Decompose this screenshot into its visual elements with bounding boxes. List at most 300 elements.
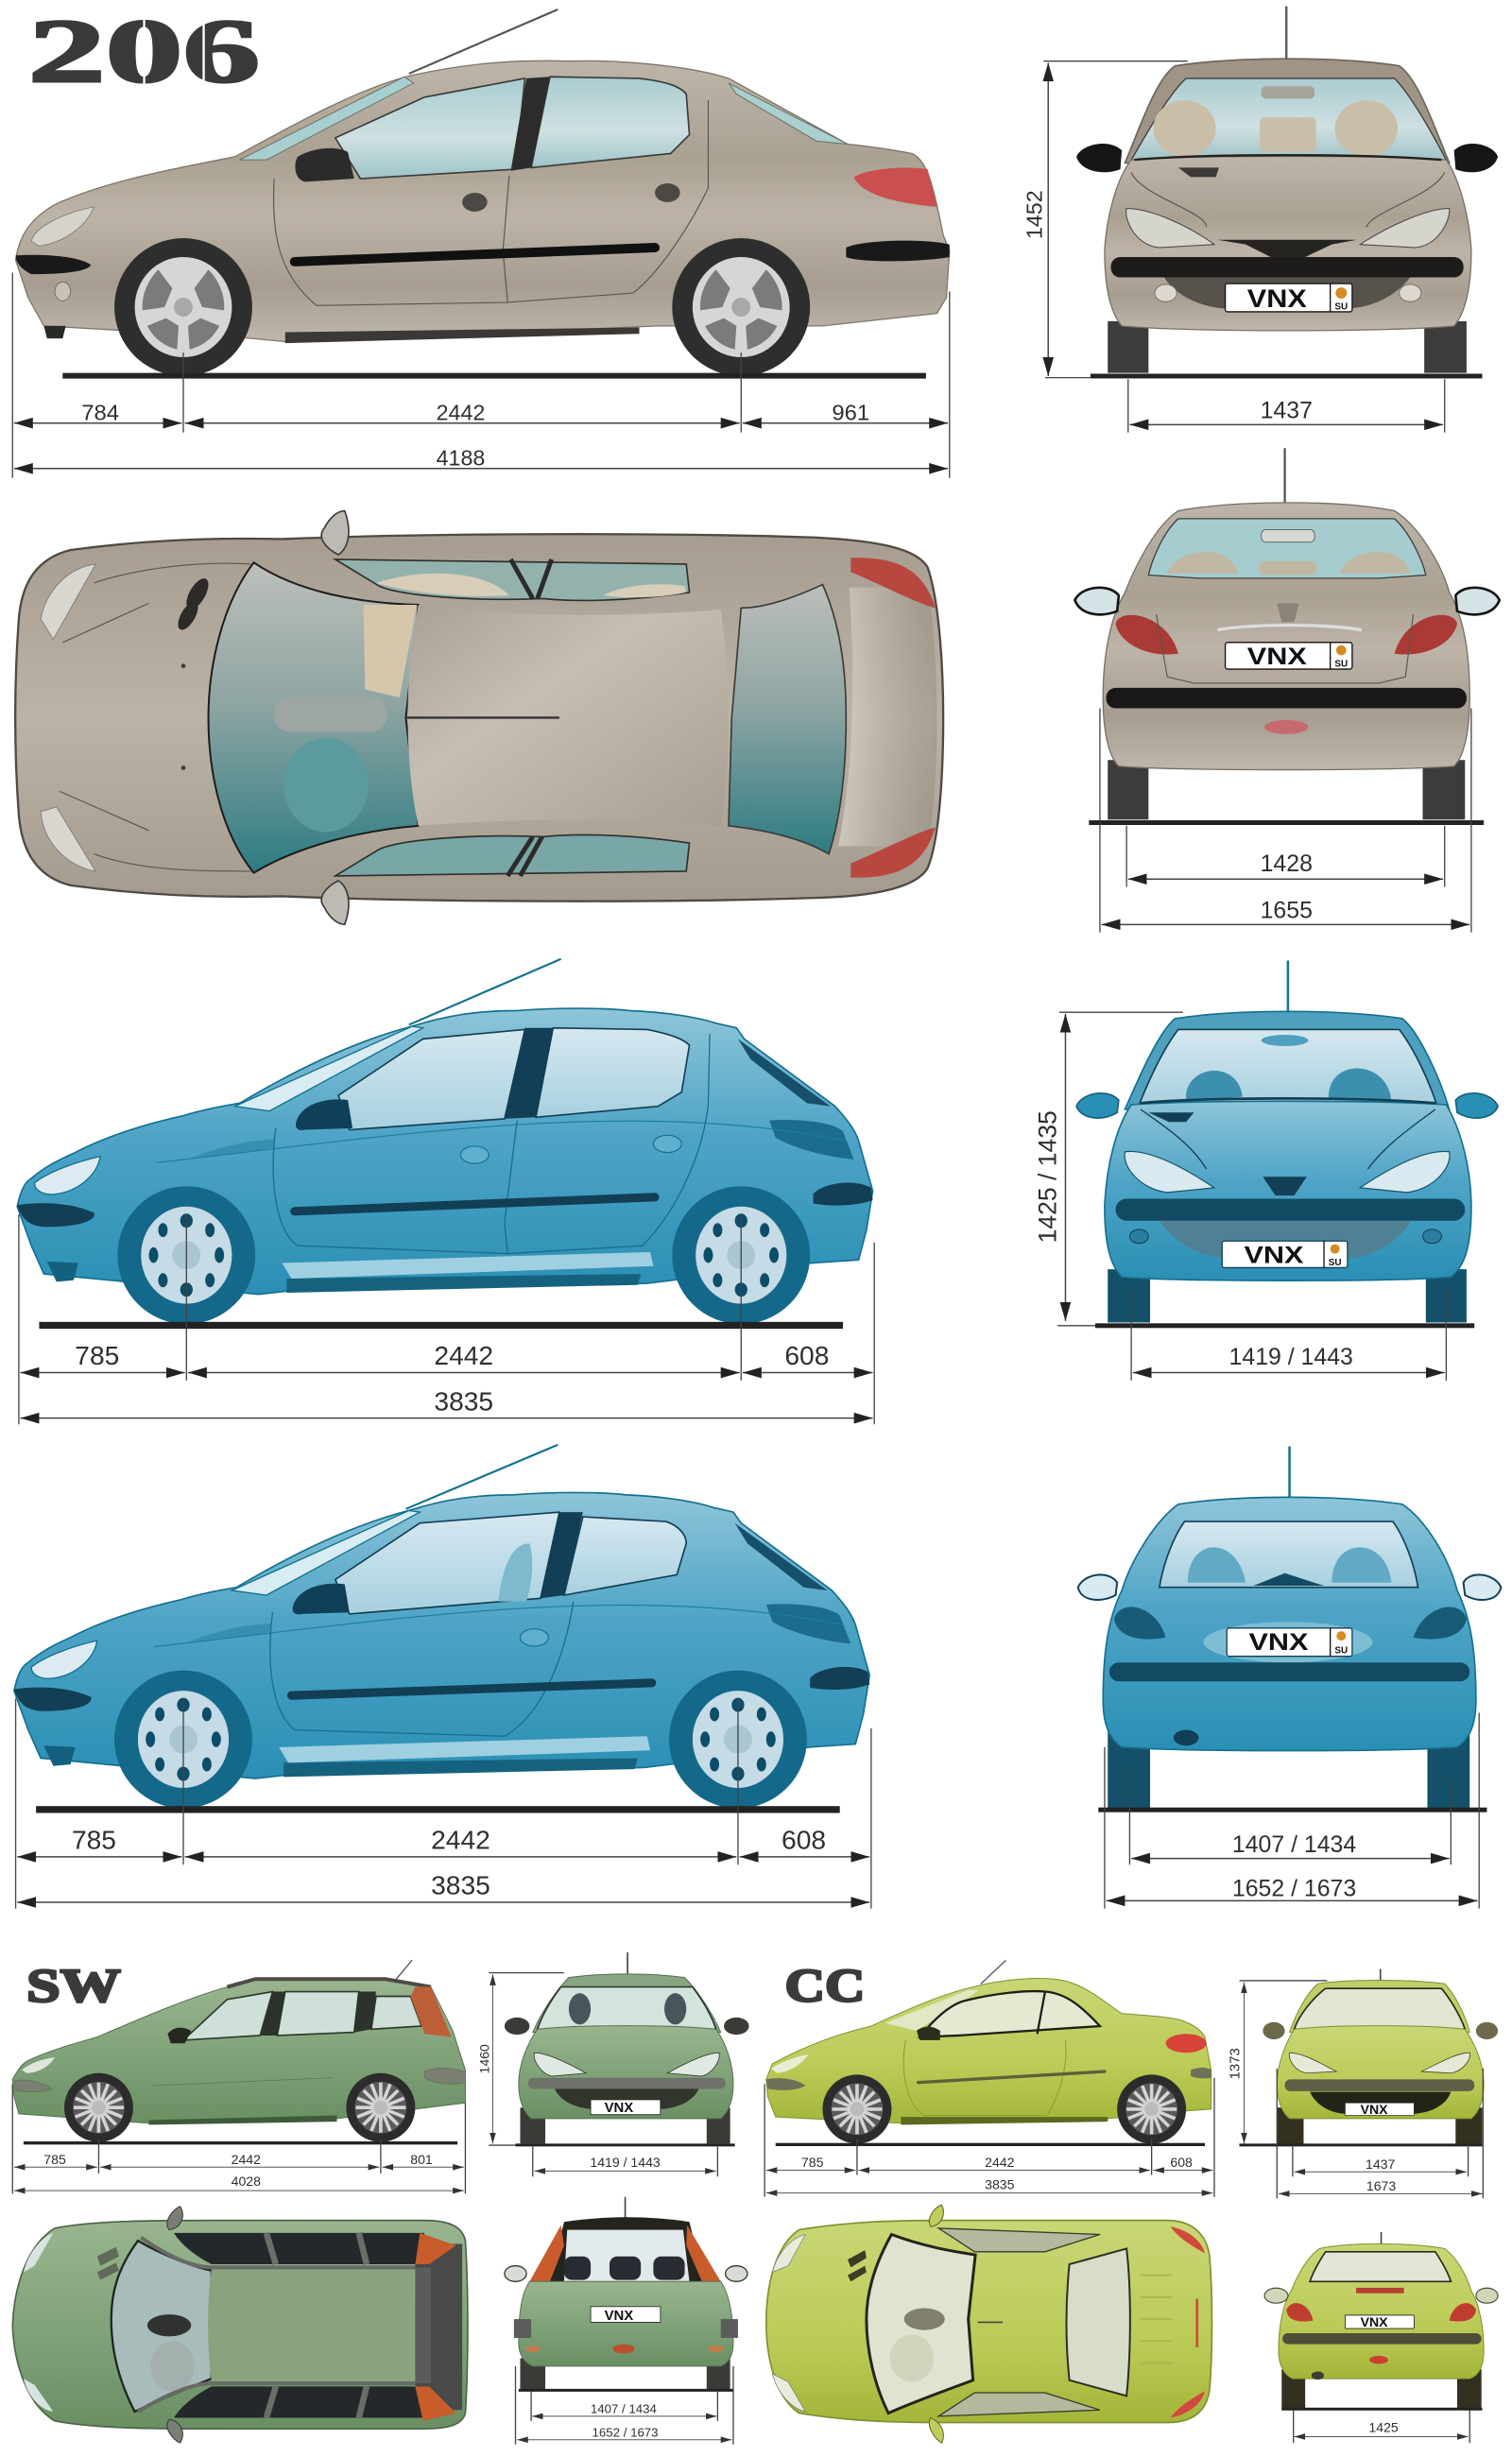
tail light bbox=[854, 168, 937, 207]
dimensions: CC side: 608 bbox=[1170, 2155, 1193, 2170]
roof rail bbox=[227, 1979, 431, 1987]
panel: SW front view bbox=[505, 1952, 749, 2146]
front window bbox=[183, 1992, 272, 2040]
panel: 3-door side view bbox=[14, 1445, 869, 1813]
body bbox=[519, 2281, 733, 2366]
antenna bbox=[1380, 1968, 1382, 1987]
orange pillars bbox=[415, 2233, 455, 2421]
rear window bbox=[564, 1517, 686, 1595]
dimensions: CC side: 3835 bbox=[985, 2176, 1015, 2191]
windscreen bbox=[112, 2241, 212, 2412]
panel: SW side view bbox=[12, 1960, 465, 2144]
antenna bbox=[625, 2197, 627, 2221]
dimensions: sedan rear bbox=[1100, 708, 1471, 933]
hood lines bbox=[1131, 172, 1445, 227]
body bbox=[1105, 156, 1471, 331]
bumper strip bbox=[1116, 1198, 1465, 1221]
antenna bbox=[409, 959, 561, 1024]
mirrors bbox=[1076, 144, 1498, 172]
side lamps bbox=[514, 2319, 738, 2338]
dimensions: hatch rear: 1407 / 1434 bbox=[1232, 1831, 1356, 1858]
hood dots bbox=[181, 663, 185, 770]
vents bbox=[1178, 167, 1219, 177]
roof rails bbox=[138, 2238, 415, 2412]
panel: CC top view bbox=[766, 2205, 1211, 2443]
bumper strip bbox=[1109, 1662, 1469, 1681]
panel: hatch rear view bbox=[1078, 1446, 1501, 1813]
side window top bbox=[335, 559, 690, 600]
strips bbox=[766, 2068, 1211, 2090]
door lines bbox=[273, 100, 708, 305]
rear deck stripes bbox=[1141, 2276, 1172, 2363]
boot panel bbox=[1157, 614, 1414, 683]
side moulding bbox=[291, 1683, 652, 1695]
cabin bbox=[1125, 1011, 1450, 1109]
ground line bbox=[36, 1806, 840, 1813]
high brake light bbox=[1196, 2299, 1198, 2347]
body bbox=[15, 534, 943, 902]
rear window bbox=[1160, 1521, 1418, 1588]
interior top bbox=[376, 574, 686, 597]
dimensions: 5-door side: 785 bbox=[75, 1340, 119, 1370]
B pillar bbox=[511, 77, 550, 171]
number plate bbox=[591, 2307, 661, 2324]
mirrors bbox=[505, 2266, 747, 2281]
lower grille bbox=[1160, 1221, 1412, 1259]
seat bbox=[150, 2341, 195, 2391]
seats bbox=[1167, 552, 1410, 576]
dimensions: 3-door side: 785 bbox=[72, 1825, 116, 1855]
body bbox=[766, 1979, 1211, 2123]
antenna bbox=[395, 1960, 412, 1981]
bumper strip bbox=[1107, 688, 1467, 708]
body bbox=[766, 2221, 1211, 2423]
wiper line bbox=[1134, 155, 1441, 160]
number plate: VNX bbox=[1248, 1629, 1309, 1656]
seat bbox=[498, 1543, 532, 1602]
number plate bbox=[1226, 284, 1352, 313]
antenna bbox=[1287, 960, 1289, 1015]
cabin and body bbox=[1103, 503, 1469, 770]
panel: 5-door front view bbox=[1076, 960, 1498, 1328]
dimensions: 5-door side bbox=[19, 1214, 874, 1424]
plate recess bbox=[1203, 1622, 1372, 1662]
dimensions: 5-door side: 608 bbox=[784, 1340, 829, 1370]
panel: sedan top view bbox=[15, 511, 943, 924]
ground line bbox=[1095, 1323, 1474, 1328]
dimensions: CC front: 1373 bbox=[1228, 2048, 1244, 2079]
tail lights bbox=[850, 558, 936, 878]
dimensions: sedan front bbox=[1022, 61, 1445, 433]
rear lamps bbox=[524, 2345, 724, 2354]
dimensions: SW side bbox=[12, 2084, 465, 2193]
dimensions: sedan side: 2442 bbox=[437, 400, 485, 424]
dimensions: sedan front: 1437 bbox=[1261, 398, 1313, 424]
dimensions: 5-door side: 3835 bbox=[434, 1385, 493, 1416]
sill bbox=[285, 328, 639, 343]
headlights bbox=[1289, 2053, 1469, 2073]
rear window bbox=[371, 1996, 421, 2029]
grille bbox=[1310, 2092, 1451, 2114]
windscreen bbox=[538, 1987, 716, 2029]
number plate: VNX bbox=[605, 2308, 633, 2324]
number plate: SU bbox=[1334, 301, 1348, 312]
dimensions: 5-door front bbox=[1034, 1012, 1446, 1381]
pillar bbox=[505, 1028, 553, 1119]
body bbox=[1277, 2026, 1484, 2119]
mirror inner bbox=[1262, 86, 1314, 98]
mirrors bbox=[929, 2205, 943, 2443]
wheels bbox=[117, 1186, 810, 1324]
cabin bbox=[533, 1974, 721, 2033]
door lines bbox=[273, 1034, 710, 1254]
dimensions: SW rear: 1652 / 1673 bbox=[593, 2425, 659, 2439]
dimensions: sedan side: 961 bbox=[832, 400, 869, 424]
ground line bbox=[519, 2389, 733, 2392]
dimensions: sedan front: 1452 bbox=[1022, 190, 1047, 239]
dimensions: 3-door side: 608 bbox=[782, 1825, 826, 1855]
bumper strip bbox=[528, 2078, 726, 2088]
exhaust bbox=[1312, 2371, 1324, 2380]
pillar bbox=[541, 1512, 583, 1598]
vents bbox=[174, 576, 213, 633]
badge and grille bar bbox=[1217, 240, 1357, 257]
tyres bbox=[1108, 760, 1465, 819]
dimensions: CC front: 1437 bbox=[1366, 2156, 1396, 2172]
door line bbox=[903, 2040, 1066, 2116]
number plate: VNX bbox=[1361, 2102, 1388, 2117]
tyres bbox=[520, 2359, 730, 2390]
side windows bbox=[938, 2228, 1100, 2416]
dimensions: hatch rear: 1652 / 1673 bbox=[1232, 1875, 1356, 1901]
wheels bbox=[822, 2074, 1186, 2143]
tail lights bbox=[1114, 1607, 1467, 1640]
ground line bbox=[1240, 2143, 1482, 2146]
body bbox=[14, 1492, 869, 1778]
number plate: SU bbox=[1334, 660, 1348, 670]
number plate bbox=[1345, 2314, 1414, 2329]
number plate: SU bbox=[1329, 1258, 1342, 1268]
window pillars bbox=[511, 559, 552, 598]
dimensions: 3-door side bbox=[16, 1698, 871, 1909]
mirror bbox=[293, 1584, 350, 1614]
mirror bbox=[296, 1099, 352, 1130]
tyres bbox=[1108, 1269, 1467, 1322]
antenna bbox=[405, 716, 559, 718]
tyres bbox=[1108, 321, 1467, 373]
number plate: VNX bbox=[605, 2100, 633, 2116]
mirrors bbox=[321, 511, 349, 924]
wheels bbox=[114, 238, 810, 376]
windshield bbox=[240, 77, 414, 160]
antenna bbox=[409, 9, 558, 74]
side window bbox=[919, 1991, 1100, 2037]
heading: CC: CC bbox=[785, 1959, 865, 2011]
orange pillars bbox=[529, 2225, 721, 2281]
handles bbox=[460, 1135, 681, 1163]
rear deck highlight bbox=[838, 588, 937, 846]
dimensions: sedan side: 784 bbox=[81, 400, 119, 424]
badge bbox=[1263, 1177, 1307, 1195]
rear screen bbox=[1066, 2248, 1130, 2396]
rear window bbox=[536, 1028, 690, 1117]
side moulding bbox=[919, 2071, 1105, 2083]
dimensions: SW side: 2442 bbox=[232, 2152, 261, 2167]
front window bbox=[338, 1029, 524, 1130]
headlights bbox=[1125, 1151, 1450, 1193]
dimensions: sedan side: 4188 bbox=[437, 445, 485, 470]
rear fog lamp bbox=[1264, 720, 1308, 734]
windscreen bbox=[1295, 1988, 1465, 2029]
side windows bbox=[174, 2233, 424, 2418]
rear window bbox=[1148, 519, 1426, 578]
dimensions: hatch rear bbox=[1105, 1712, 1479, 1909]
body bbox=[1103, 1497, 1476, 1751]
antenna bbox=[1284, 448, 1286, 503]
dimensions: SW front: 1419 / 1443 bbox=[590, 2155, 661, 2170]
inner mirror bbox=[1262, 529, 1314, 542]
wheels bbox=[64, 2073, 415, 2142]
panel: SW rear view bbox=[505, 2197, 747, 2392]
panel: CC rear view bbox=[1264, 2232, 1498, 2411]
number plate bbox=[1345, 2102, 1414, 2117]
dimensions: SW front: 1460 bbox=[476, 2044, 491, 2073]
panel: sedan rear view bbox=[1074, 448, 1500, 825]
grille bbox=[555, 2088, 698, 2109]
panel: CC side view bbox=[766, 1960, 1211, 2146]
steering shadow bbox=[904, 2308, 945, 2330]
antenna bbox=[1381, 2232, 1383, 2245]
headlights bbox=[772, 2235, 805, 2412]
number plate bbox=[1227, 1628, 1352, 1657]
mirrors bbox=[1076, 1093, 1498, 1118]
tail lights bbox=[1116, 615, 1457, 654]
roof bbox=[208, 2269, 415, 2381]
dimensions: SW rear bbox=[515, 2366, 733, 2445]
body bbox=[12, 2221, 468, 2429]
windscreen bbox=[1131, 78, 1446, 160]
seats bbox=[1186, 1068, 1391, 1100]
dimensions: CC front: 1673 bbox=[1366, 2178, 1396, 2193]
orange rear pillar bbox=[410, 1987, 452, 2037]
main window bbox=[335, 1512, 559, 1614]
number plate: VNX bbox=[1244, 1242, 1304, 1268]
door lines bbox=[270, 1602, 574, 1736]
seats bbox=[569, 1993, 686, 2024]
mirror bbox=[167, 2028, 191, 2043]
number plate bbox=[1226, 643, 1352, 670]
dimensions: SW side: 785 bbox=[43, 2152, 66, 2167]
dimensions: SW side: 801 bbox=[410, 2152, 433, 2167]
vents bbox=[848, 2250, 867, 2281]
tail light bbox=[1166, 2034, 1207, 2053]
windscreen bbox=[209, 562, 419, 873]
body bbox=[12, 1979, 465, 2123]
dimensions: 5-door side: 2442 bbox=[434, 1340, 493, 1370]
dimensions: CC front bbox=[1228, 1981, 1483, 2198]
heading: SW: SW bbox=[26, 1959, 121, 2011]
tail lights bbox=[1286, 2303, 1476, 2321]
antenna bbox=[1285, 7, 1287, 66]
mirrors bbox=[167, 2207, 182, 2443]
headlights bbox=[24, 2233, 53, 2412]
antenna bbox=[627, 1952, 628, 1974]
windshield bbox=[885, 1990, 979, 2031]
number plate: VNX bbox=[1247, 284, 1307, 313]
title: 206: 206 bbox=[28, 0, 260, 101]
dimensions: SW rear: 1407 / 1434 bbox=[591, 2402, 657, 2416]
antenna bbox=[978, 2321, 1003, 2323]
sill bbox=[901, 2117, 1108, 2124]
dimensions: CC side: 785 bbox=[801, 2155, 824, 2170]
lower grille bbox=[1164, 277, 1410, 309]
window bbox=[1310, 2252, 1451, 2281]
dimensions: 5-door front: 1419 / 1443 bbox=[1229, 1344, 1353, 1370]
number plate: SU bbox=[1334, 1645, 1348, 1656]
headlight bbox=[31, 207, 94, 246]
mirrors bbox=[1263, 2022, 1498, 2039]
hood lines bbox=[60, 563, 250, 871]
ground line bbox=[39, 1322, 843, 1329]
panel: SW top view bbox=[12, 2207, 468, 2443]
headlights bbox=[534, 2053, 719, 2076]
vents bbox=[97, 2247, 119, 2280]
tow hook bbox=[1174, 1730, 1198, 1745]
ground line bbox=[1281, 2408, 1482, 2411]
plate trim bbox=[1217, 626, 1362, 630]
mirrors bbox=[1264, 2288, 1498, 2303]
panel: sedan front view bbox=[1076, 7, 1498, 378]
fog lamps bbox=[1155, 284, 1421, 301]
rear bumper strip bbox=[846, 241, 950, 261]
dimensions: SW front bbox=[476, 1973, 717, 2176]
antenna bbox=[981, 1960, 1005, 1984]
antenna bbox=[405, 1445, 558, 1509]
badge bbox=[1277, 603, 1299, 622]
inner mirror bbox=[1262, 1035, 1308, 1046]
pillars bbox=[260, 1992, 376, 2036]
headlights bbox=[1126, 209, 1450, 248]
panel: sedan side view bbox=[16, 9, 950, 379]
front seats bbox=[274, 605, 417, 832]
window pillars bbox=[266, 2233, 367, 2418]
dimensions: 3-door side: 3835 bbox=[431, 1870, 490, 1900]
dimensions: CC side bbox=[765, 2078, 1214, 2197]
handle bbox=[520, 1629, 548, 1646]
window pillar bbox=[1038, 1992, 1045, 2034]
dimensions: sedan side bbox=[12, 273, 950, 478]
mirror bbox=[917, 2027, 940, 2040]
mirrors bbox=[1078, 1574, 1501, 1600]
body bbox=[519, 2026, 733, 2119]
cabin bbox=[1125, 59, 1450, 163]
dimensions: sedan rear: 1428 bbox=[1261, 850, 1313, 877]
front bumper strip bbox=[16, 255, 91, 274]
roof bbox=[408, 605, 729, 826]
tail lights bbox=[1171, 2226, 1205, 2418]
rear fog lamp bbox=[1369, 2356, 1388, 2364]
seats bbox=[564, 2257, 685, 2280]
bumper strip bbox=[1282, 2333, 1482, 2345]
panel: CC front view bbox=[1240, 1968, 1498, 2146]
sill bbox=[149, 2116, 336, 2124]
strips bbox=[14, 2068, 465, 2092]
fog lamp bbox=[55, 282, 71, 301]
ground line bbox=[515, 2143, 735, 2146]
panel: 5-door side view bbox=[17, 959, 873, 1329]
bumper strip bbox=[1285, 2079, 1474, 2091]
dimensions: sedan rear: 1655 bbox=[1261, 898, 1313, 924]
ground line bbox=[24, 2141, 457, 2144]
rear window bbox=[531, 77, 690, 167]
headlights bbox=[41, 564, 95, 871]
dimensions: 5-door front: 1425 / 1435 bbox=[1034, 1110, 1062, 1243]
rear pillar right bar bbox=[415, 2267, 431, 2383]
tyres bbox=[1108, 1731, 1469, 1809]
windscreen bbox=[867, 2235, 975, 2414]
dimensions: CC rear bbox=[1294, 2410, 1469, 2443]
wiper line bbox=[1141, 1098, 1435, 1103]
rear dark area bbox=[415, 2243, 462, 2410]
seat bbox=[890, 2335, 934, 2381]
front window bbox=[335, 78, 524, 179]
headlight bbox=[22, 2057, 55, 2073]
ground line bbox=[1098, 1808, 1486, 1813]
mirror bbox=[295, 148, 354, 181]
antenna bbox=[1289, 1446, 1291, 1500]
sedan body bbox=[16, 60, 950, 341]
dimensions: CC side: 2442 bbox=[985, 2155, 1015, 2170]
dimensions: 3-door side: 2442 bbox=[431, 1825, 490, 1855]
wheels bbox=[114, 1671, 807, 1809]
middle window bbox=[277, 1992, 359, 2036]
rear screen bbox=[729, 584, 846, 854]
dimensions: SW side: 4028 bbox=[232, 2174, 261, 2189]
body bbox=[1279, 2243, 1484, 2379]
brake light bbox=[1356, 2288, 1404, 2294]
cabin bbox=[1290, 1981, 1469, 2033]
bumper strip bbox=[1111, 257, 1464, 277]
rear glass bbox=[729, 83, 848, 145]
seats bbox=[1188, 1547, 1391, 1586]
fog lamps bbox=[1129, 1229, 1441, 1244]
tyres bbox=[1281, 2369, 1482, 2409]
body bbox=[17, 1008, 873, 1295]
ground line bbox=[1089, 820, 1484, 825]
number plate: VNX bbox=[1361, 2314, 1388, 2329]
windscreen bbox=[1139, 1029, 1436, 1105]
roof frame bbox=[548, 2217, 705, 2285]
number plate bbox=[1222, 1241, 1348, 1268]
side moulding bbox=[295, 248, 655, 262]
number plate bbox=[591, 2100, 661, 2116]
mirrors bbox=[505, 2018, 749, 2035]
body bbox=[1105, 1101, 1471, 1280]
title: 206 bbox=[28, 0, 260, 101]
tyres bbox=[1277, 2107, 1482, 2145]
vents bbox=[1148, 1112, 1194, 1122]
seats bbox=[1153, 100, 1398, 157]
side moulding bbox=[295, 1197, 655, 1211]
window bbox=[564, 2230, 690, 2281]
hood lines bbox=[1141, 1109, 1435, 1169]
dimensions: CC rear: 1425 bbox=[1368, 2419, 1399, 2434]
headlight bbox=[771, 2054, 809, 2073]
tyres bbox=[520, 2107, 730, 2143]
mirrors bbox=[1074, 588, 1500, 614]
ground line bbox=[62, 373, 926, 379]
steering shadow bbox=[147, 2314, 191, 2336]
